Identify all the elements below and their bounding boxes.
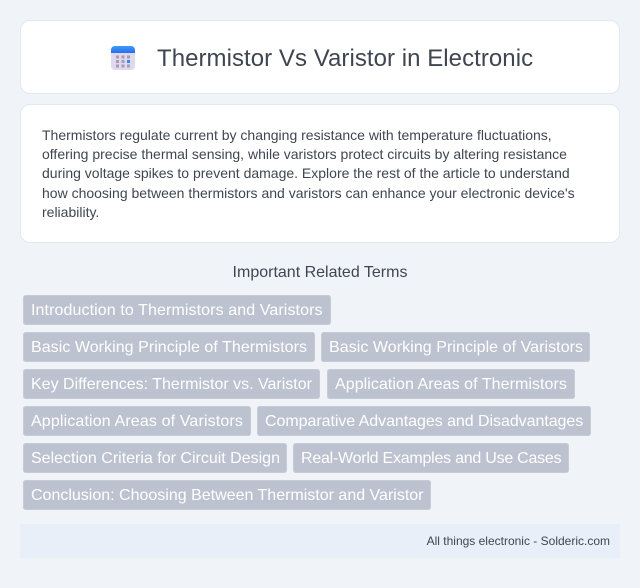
intro paragraph: how choosing between thermistors and varistors can enhance your electronic device's: [42, 185, 575, 201]
header card: [20, 20, 620, 94]
tag list: Key Differences: Thermistor vs. Varistor: [31, 376, 312, 393]
tag list: Selection Criteria for Circuit Design: [31, 450, 280, 467]
tag list: Conclusion: Choosing Between Thermistor and Varistor: [31, 487, 424, 504]
tag list: Comparative Advantages and Disadvantages: [265, 413, 583, 430]
tag list: Real-World Examples and Use Cases: [301, 450, 561, 467]
intro paragraph: Thermistors regulate current by changing resistance with temperature fluctuations,: [42, 127, 552, 143]
intro paragraph: [42, 127, 575, 220]
tag list: Application Areas of Thermistors: [335, 376, 567, 393]
tag list: Application Areas of Varistors: [31, 413, 243, 430]
intro paragraph: offering precise thermal sensing, while varistors protect circuits by altering resistance: [42, 146, 567, 162]
intro text panel: [20, 104, 620, 243]
footer bar: [20, 524, 620, 558]
heading: important related terms: Important Related Terms: [233, 264, 407, 281]
tag list: Basic Working Principle of Varistors: [329, 339, 583, 356]
tag list: [23, 295, 591, 510]
tag list: Basic Working Principle of Thermistors: [31, 339, 307, 356]
footer text: All things electronic - Solderic.com: [427, 534, 610, 548]
intro paragraph: during voltage spikes to prevent damage. Explore the rest of the article to understand: [42, 165, 570, 181]
tag list: Introduction to Thermistors and Varistors: [31, 302, 323, 319]
intro paragraph: reliability.: [42, 204, 99, 220]
title: Thermistor Vs Varistor in Electronic: [157, 45, 533, 72]
icon: calendar grid: [111, 46, 135, 70]
